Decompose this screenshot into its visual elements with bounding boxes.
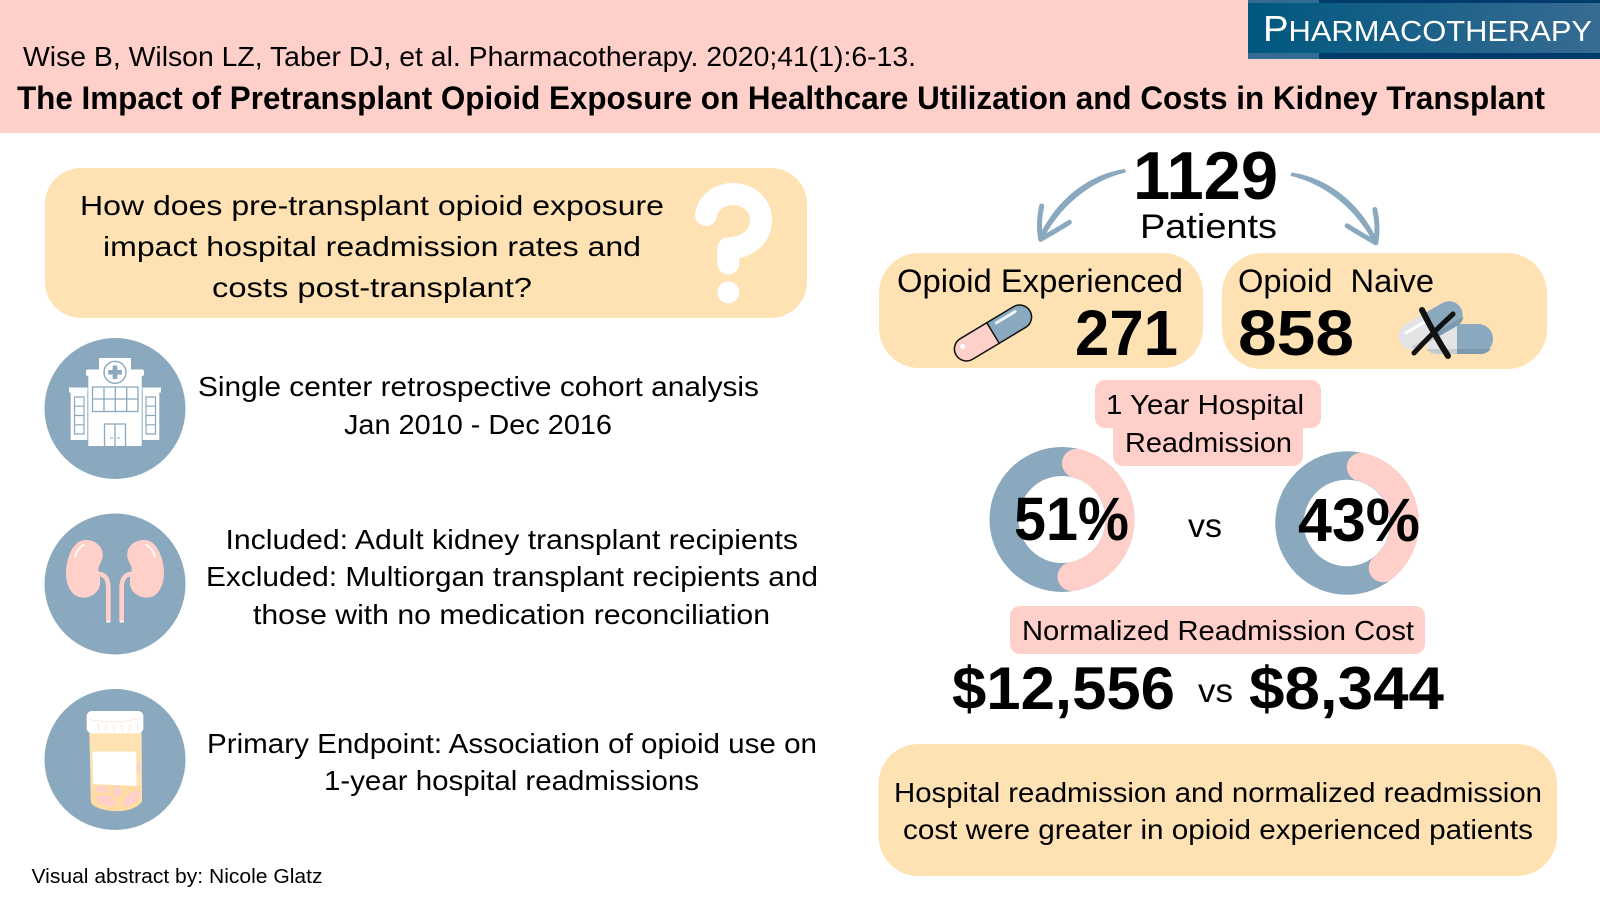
panel: conclusion: cost were greater in opioid experienced patients bbox=[903, 814, 1533, 845]
icon: pill bottle bbox=[44, 689, 186, 830]
panel: conclusion: Hospital readmission and normalized readmission bbox=[894, 777, 1542, 808]
primary endpoint text: Primary Endpoint: Association of opioid use on bbox=[207, 728, 817, 759]
donut chart: 51 percent bbox=[1004, 462, 1129, 578]
panel: research question: costs post-transplant? bbox=[212, 272, 532, 303]
panel: opioid experienced: Opioid Experienced bbox=[897, 263, 1183, 299]
inclusion and exclusion criteria text: Excluded: Multiorgan transplant recipients and bbox=[206, 561, 818, 592]
header banner bbox=[0, 0, 1600, 133]
author credit: Visual abstract by: Nicole Glatz bbox=[32, 866, 322, 888]
study design text bbox=[198, 371, 759, 440]
primary endpoint text: 1-year hospital readmissions bbox=[324, 765, 699, 796]
panel: opioid experienced: 271 bbox=[1075, 297, 1178, 369]
panel: opioid naive bbox=[1222, 253, 1547, 369]
panel: opioid naive: Opioid Naive bbox=[1238, 263, 1434, 299]
cost comparison bbox=[952, 655, 1445, 722]
donut chart: 43 percent bbox=[1290, 466, 1420, 580]
panel: conclusion bbox=[878, 744, 1557, 876]
patient total bbox=[1133, 138, 1278, 246]
patient total: Patients bbox=[1140, 208, 1277, 246]
journal logo bbox=[1248, 0, 1600, 59]
primary endpoint text bbox=[207, 728, 817, 796]
label: normalized readmission cost: Normalized Readmission Cost bbox=[1022, 615, 1414, 646]
panel: research question: impact hospital readmission rates and bbox=[103, 231, 641, 262]
icon: question mark bbox=[706, 194, 761, 303]
inclusion and exclusion criteria text: those with no medication reconciliation bbox=[253, 599, 770, 630]
label: 1 year hospital readmission bbox=[1095, 380, 1321, 466]
donut chart: 51 percent: 51% bbox=[1014, 485, 1129, 553]
panel: opioid naive: 858 bbox=[1238, 297, 1354, 369]
panel: research question bbox=[45, 168, 807, 318]
cost comparison: $12,556 bbox=[952, 655, 1175, 722]
cost comparison: vs bbox=[1198, 672, 1233, 709]
study design text: Single center retrospective cohort analysis bbox=[198, 371, 759, 402]
label: 1 year hospital readmission: Readmission bbox=[1125, 427, 1292, 458]
donut chart: 43 percent: 43% bbox=[1298, 486, 1420, 554]
title: The Impact of Pretransplant Opioid Exposure on Healthcare Utilization and Costs in Kidney Transplant bbox=[17, 80, 1545, 116]
inclusion and exclusion criteria text: Included: Adult kidney transplant recipients bbox=[226, 524, 798, 555]
icon: hospital bbox=[44, 338, 186, 479]
study design text: Jan 2010 - Dec 2016 bbox=[344, 409, 612, 440]
patient total: 1129 bbox=[1133, 138, 1278, 214]
label: normalized readmission cost bbox=[1010, 606, 1425, 654]
panel: opioid experienced bbox=[879, 253, 1203, 369]
vs label: vs bbox=[1188, 507, 1222, 544]
panel: research question: How does pre-transplant opioid exposure bbox=[80, 190, 664, 221]
journal logo: PHARMACOTHERAPY bbox=[1263, 8, 1592, 49]
icon: kidneys bbox=[44, 514, 186, 654]
icon: capsule bbox=[950, 301, 1036, 365]
cost comparison: $8,344 bbox=[1249, 655, 1445, 722]
icon: crossed-out capsules bbox=[1393, 296, 1493, 356]
inclusion and exclusion criteria text bbox=[206, 524, 818, 630]
arrow: to opioid experienced bbox=[1039, 169, 1126, 239]
citation: Wise B, Wilson LZ, Taber DJ, et al. Pharmacotherapy. 2020;41(1):6-13. bbox=[23, 41, 916, 72]
label: 1 year hospital readmission: 1 Year Hospital bbox=[1106, 389, 1304, 420]
arrow: to opioid naive bbox=[1291, 172, 1377, 243]
